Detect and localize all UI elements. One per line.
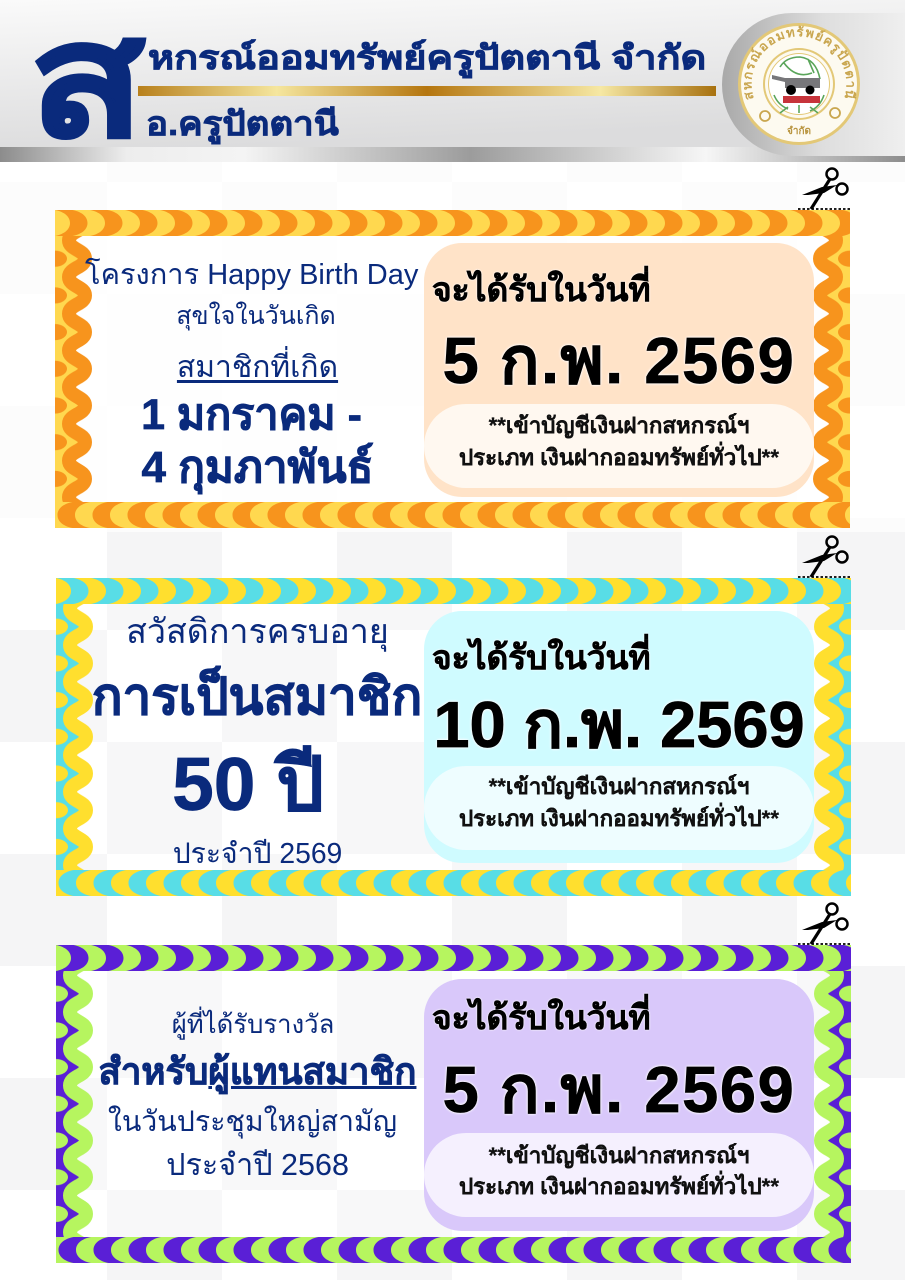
date range line 2: 4 กุมภาพันธ์	[142, 443, 374, 492]
note pill	[424, 766, 814, 850]
heading: จะได้รับในวันที่	[432, 640, 651, 677]
note pill: **เข้าบัญชีเงินฝากสหกรณ์ฯ	[489, 1143, 749, 1168]
panel: 50 years payment date	[424, 611, 814, 863]
year: ประจำปี 2569	[173, 837, 342, 869]
project name: โครงการ Happy Birth Day	[85, 259, 418, 291]
wavy frame: cyan and yellow	[56, 578, 851, 896]
members label: สมาชิกที่เกิด	[177, 351, 338, 384]
panel: birthday payment date	[424, 243, 814, 497]
subtitle: สุขใจในวันเกิด	[176, 302, 336, 330]
award label: ผู้ที่ได้รับรางวัล	[172, 1011, 334, 1039]
note pill	[424, 1133, 814, 1217]
heading: จะได้รับในวันที่	[432, 272, 651, 309]
logo backing panel	[722, 13, 905, 156]
header banner	[0, 0, 905, 171]
scissors icon 2	[798, 535, 850, 578]
cooperative seal logo: จำกัด	[787, 125, 811, 137]
note pill: ประเภท เงินฝากออมทรัพย์ทั่วไป**	[459, 1174, 779, 1199]
wavy frame: purple and lime	[56, 945, 851, 1263]
scissors icon 1	[798, 167, 850, 210]
welfare label: สวัสดิการครบอายุ	[126, 613, 389, 651]
panel: representative award text	[99, 1006, 416, 1182]
membership heading: การเป็นสมาชิก	[92, 668, 422, 725]
cooperative name: หกรณ์ออมทรัพย์ครูปัตตานี จำกัด	[148, 39, 706, 76]
representative heading: สำหรับผู้แทนสมาชิก	[99, 1051, 416, 1092]
wavy frame: orange	[55, 210, 850, 528]
note pill: ประเภท เงินฝากออมทรัพย์ทั่วไป**	[459, 806, 779, 831]
gold bar	[138, 86, 716, 96]
panel: 50 years text	[92, 613, 422, 869]
date: 5 ก.พ. 2569	[443, 324, 795, 397]
cooperative seal logo	[738, 23, 860, 145]
panel: birthday text	[85, 258, 418, 494]
note pill	[424, 404, 814, 488]
heading: จะได้รับในวันที่	[432, 1000, 651, 1037]
meeting line: ในวันประชุมใหญ่สามัญ	[108, 1106, 397, 1138]
date: 10 ก.พ. 2569	[433, 688, 805, 761]
scissors icon 3	[798, 902, 850, 945]
year: ประจำปี 2568	[166, 1148, 349, 1182]
50 years: 50 ปี	[172, 742, 324, 826]
panel: representative payment date	[424, 979, 814, 1231]
cooperative seal logo: สหกรณ์ออมทรัพย์ครูปัตตานี	[744, 26, 856, 100]
note pill: **เข้าบัญชีเงินฝากสหกรณ์ฯ	[489, 413, 749, 438]
note pill: **เข้าบัญชีเงินฝากสหกรณ์ฯ	[489, 774, 749, 799]
short name: อ.ครูปัตตานี	[146, 105, 339, 142]
date range line 1: 1 มกราคม -	[141, 391, 362, 439]
note pill: ประเภท เงินฝากออมทรัพย์ทั่วไป**	[459, 445, 779, 470]
date: 5 ก.พ. 2569	[443, 1053, 795, 1126]
